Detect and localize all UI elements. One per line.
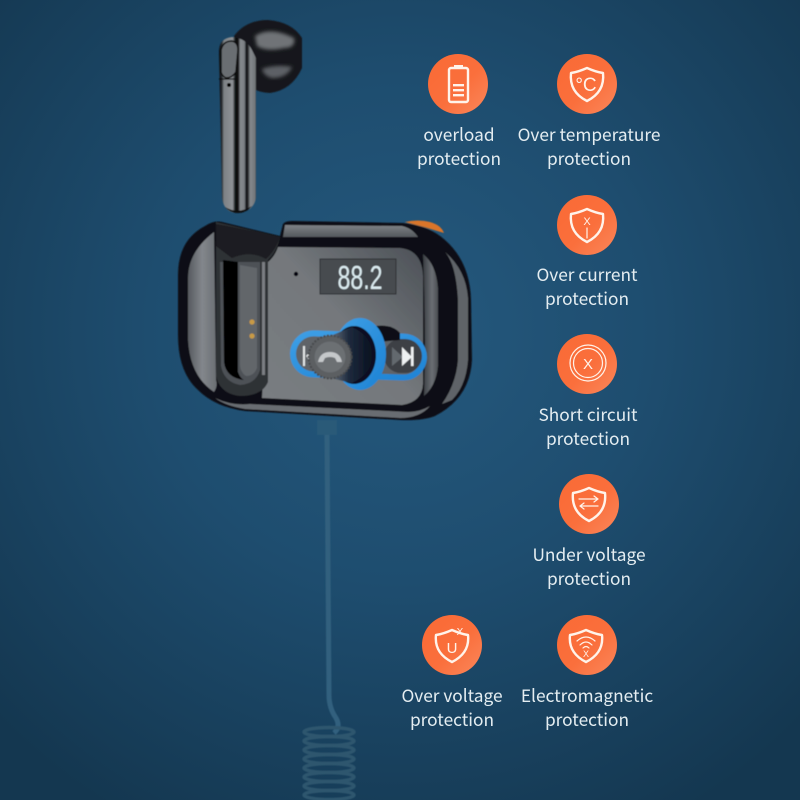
feature: over voltage protection	[401, 615, 503, 731]
feature: over voltage protection: protection	[410, 706, 494, 731]
phone knob	[308, 336, 352, 378]
earbud	[219, 20, 302, 213]
feature: short circuit protection: Short circuit	[538, 401, 638, 426]
previous track icon	[303, 346, 313, 366]
mic hole	[294, 272, 298, 276]
icon: shield celsius: °C	[575, 75, 597, 96]
icon: shield U: X	[457, 627, 464, 638]
icon: shield U	[436, 627, 468, 662]
feature: overload protection	[417, 54, 501, 170]
feature: overload protection: protection	[417, 145, 501, 170]
FM display: 88.2	[338, 259, 382, 296]
next track icon	[392, 347, 403, 366]
feature: over current protection: Over current	[536, 261, 638, 286]
feature: over temperature protection: Over temperature	[518, 121, 660, 146]
feature: overload protection: overload	[423, 121, 495, 146]
icon: shield wifi: X	[583, 649, 589, 659]
feature: electromagnetic protection: protection	[545, 706, 629, 731]
front face panel	[262, 247, 423, 405]
blue dial ring	[334, 318, 386, 390]
feature: under voltage protection	[532, 474, 646, 590]
dial stub	[376, 326, 400, 342]
feature: over current protection: protection	[545, 285, 629, 310]
dial barrel	[330, 326, 376, 384]
feature: short circuit protection: protection	[546, 425, 630, 450]
icon: shield arrows	[573, 488, 605, 521]
control pill	[289, 330, 428, 381]
orange button	[405, 220, 444, 233]
feature: electromagnetic protection	[521, 615, 653, 731]
earbud slot	[216, 222, 280, 396]
coiled cable	[304, 420, 354, 800]
feature: over temperature protection	[518, 54, 660, 170]
feature: under voltage protection: protection	[547, 565, 631, 590]
feature: short circuit protection	[538, 334, 638, 450]
charger body	[178, 220, 472, 420]
feature: over current protection	[536, 195, 638, 310]
feature: under voltage protection: Under voltage	[532, 541, 646, 566]
earbud stem	[219, 37, 256, 213]
gloss highlights	[283, 225, 418, 237]
icon: shield celsius	[571, 68, 603, 101]
feature: over temperature protection: protection	[547, 145, 631, 170]
feature: electromagnetic protection: Electromagnetic	[521, 682, 653, 707]
icon: shield U: U	[447, 640, 457, 657]
feature: over voltage protection: Over voltage	[401, 682, 503, 707]
icon: concentric circle: X	[583, 356, 593, 373]
icon: battery	[449, 65, 468, 102]
icon: shield current: X	[583, 216, 591, 228]
earbud head	[234, 20, 302, 93]
